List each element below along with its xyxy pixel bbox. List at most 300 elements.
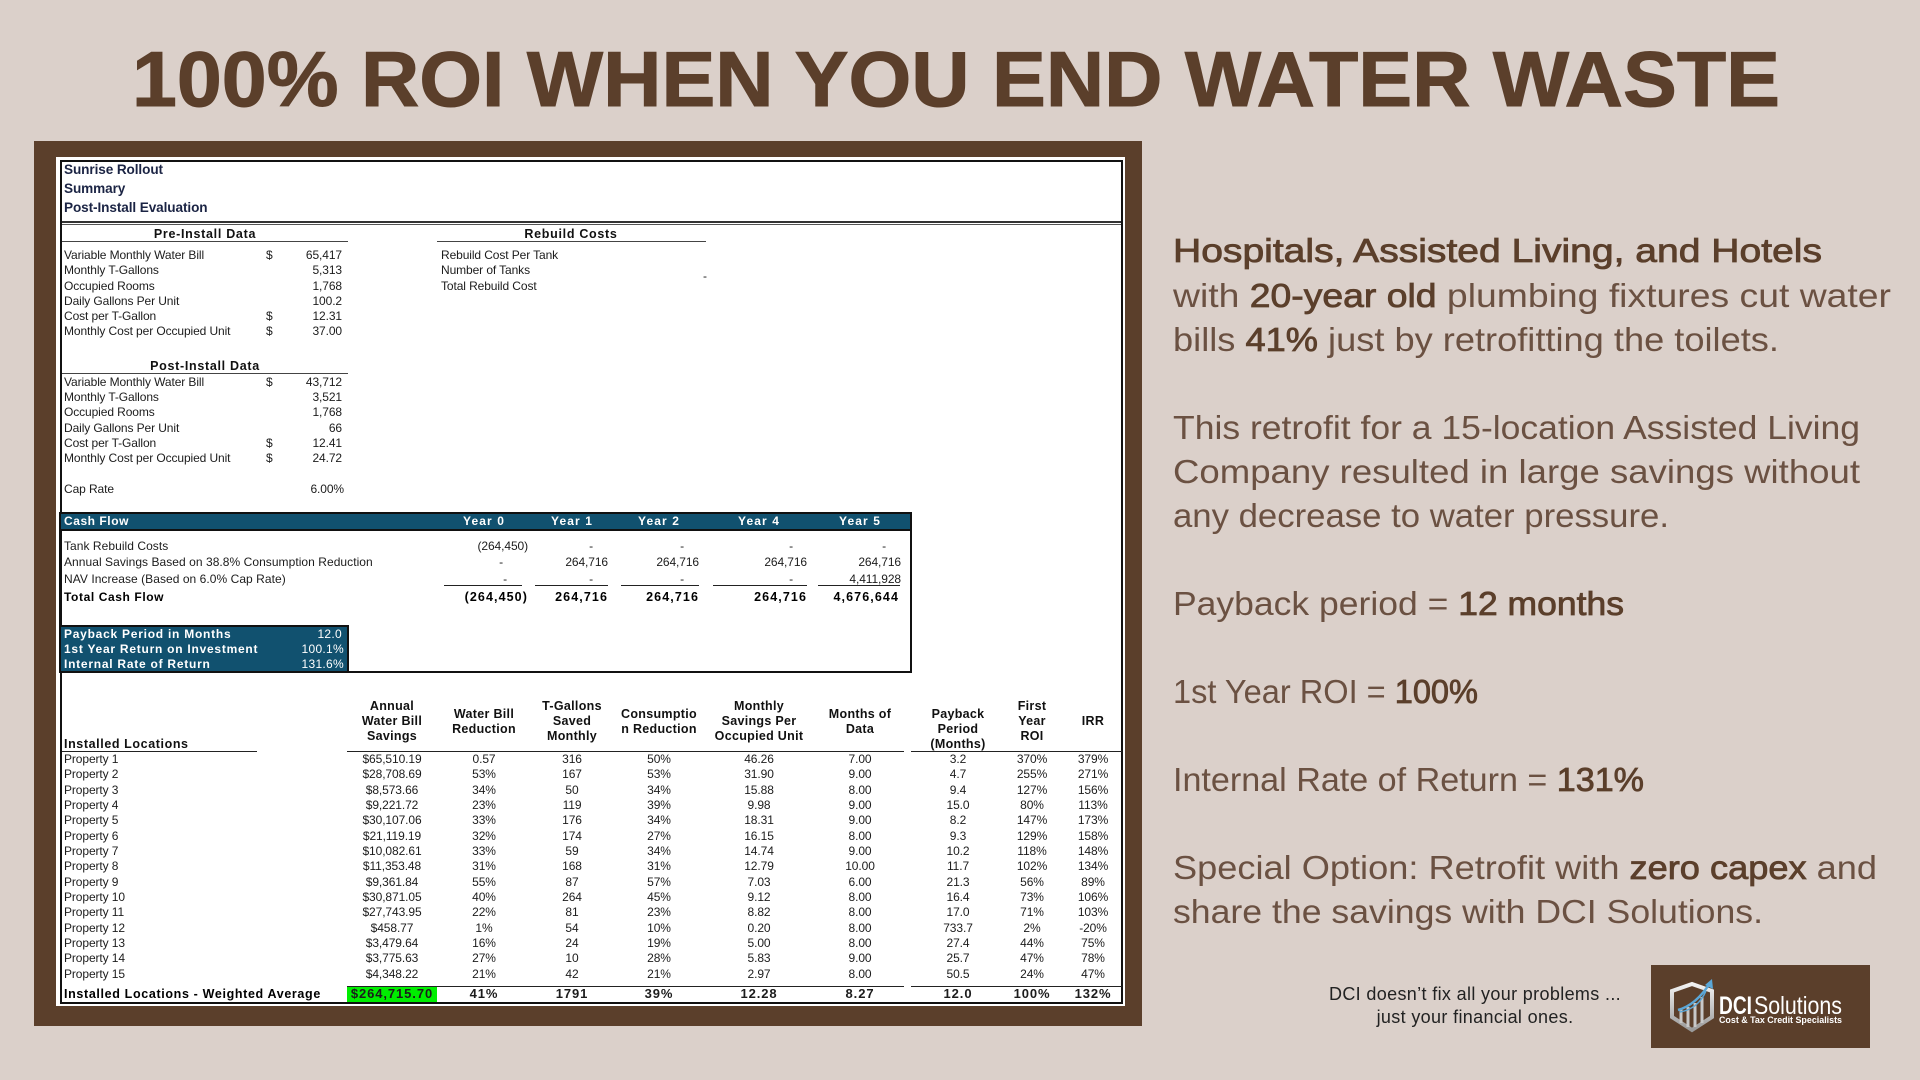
- row: property 15: 24%: [1020, 967, 1044, 981]
- row: weighted average: 12.28: [740, 986, 778, 1001]
- row: property 1: 379%: [1078, 752, 1108, 766]
- heading: rebuild costs: Rebuild Costs: [524, 227, 618, 241]
- row: property 10: 264: [562, 890, 582, 904]
- panel: post-install data: 3,521: [312, 390, 342, 404]
- panel: pre-install data: Monthly Cost per Occupied Unit: [64, 324, 230, 338]
- row: property 8: [64, 859, 1108, 873]
- panel: post-install data: [62, 359, 348, 496]
- row: property 2: $28,708.69: [362, 767, 422, 781]
- row: property 7: Property 7: [64, 844, 118, 858]
- row: property 8: 10.00: [845, 859, 875, 873]
- row: property 8: 12.79: [744, 859, 774, 873]
- row: property 9: $9,361.84: [366, 875, 418, 889]
- row: property 4: 15.0: [947, 798, 969, 812]
- text: special option: share the savings with DCI Solutions.: [1173, 893, 1763, 930]
- row: property 11: $27,743.95: [362, 905, 422, 919]
- text: special option: Special Option: Retrofit with zero capex and: [1173, 849, 1877, 886]
- row: property 10: 40%: [472, 890, 496, 904]
- row: property 3: 127%: [1017, 783, 1047, 797]
- cash flow header bar: Year 4: [738, 514, 780, 528]
- panel: pre-install data: 12.31: [312, 309, 342, 323]
- heading: hospitals, assisted living, and hotels: Hospitals, Assisted Living, and Hotels: [1173, 232, 1822, 269]
- panel: post-install data: 24.72: [312, 451, 342, 465]
- panel: pre-install data: [62, 227, 348, 338]
- panel: pre-install data: 1,768: [312, 279, 342, 293]
- summary metrics box: 131.6%: [302, 657, 344, 671]
- summary metrics box: 12.0: [317, 627, 342, 641]
- row: NAV increase: NAV Increase (Based on 6.0% Cap Rate): [64, 572, 286, 586]
- row: property 9: 21.3: [947, 875, 969, 889]
- row: property 2: 31.90: [744, 767, 774, 781]
- row: total cash flow: [64, 590, 899, 604]
- row: annual savings: 264,716: [764, 555, 807, 569]
- row: property 14: 27%: [472, 951, 496, 965]
- row: property 14: 10: [565, 951, 579, 965]
- row: property 5: Property 5: [64, 813, 118, 827]
- row: property 7: 33%: [472, 844, 496, 858]
- row: property 3: 156%: [1078, 783, 1108, 797]
- heading: post-install data: Post-Install Data: [150, 359, 260, 373]
- table column headers: Reduction: [452, 722, 516, 736]
- row: property 7: 148%: [1078, 844, 1108, 858]
- row: property 9: [64, 875, 1105, 889]
- row: weighted average: Installed Locations - Weighted Average: [64, 987, 321, 1001]
- row: property 9: 56%: [1020, 875, 1044, 889]
- panel: rebuild costs: -: [703, 269, 707, 283]
- logo wordmark: Solutions: [1754, 992, 1842, 1020]
- panel: post-install data: Occupied Rooms: [64, 405, 155, 419]
- table column headers: Consumptio: [621, 707, 697, 721]
- row: property 13: 44%: [1020, 936, 1044, 950]
- row: property 9: 55%: [472, 875, 496, 889]
- row: NAV increase: -: [589, 572, 593, 586]
- row: property 10: 106%: [1078, 890, 1108, 904]
- table column headers: Months of: [829, 707, 891, 721]
- row: property 1: 7.00: [849, 752, 871, 766]
- row: property 6: 158%: [1078, 829, 1108, 843]
- row: property 11: 8.00: [849, 905, 871, 919]
- table column headers: Water Bill: [454, 707, 514, 721]
- row: property 9: Property 9: [64, 875, 118, 889]
- row: weighted average: 1791: [556, 986, 588, 1001]
- row: property 10: 8.00: [849, 890, 871, 904]
- panel: installed locations table: [62, 699, 1122, 1002]
- row: property 8: 134%: [1078, 859, 1108, 873]
- sheet heading: [64, 162, 207, 215]
- row: property 1: 0.57: [473, 752, 495, 766]
- summary metrics box: [61, 625, 349, 671]
- row: property 2: 53%: [472, 767, 496, 781]
- summary metrics box: 100.1%: [302, 642, 344, 656]
- panel: pre-install data: $: [266, 309, 273, 323]
- row: weighted average: $264,715.70: [351, 986, 433, 1001]
- row: property 11: 81: [565, 905, 579, 919]
- text: fixtures: bills 41% just by retrofitting the toilets.: [1173, 321, 1779, 358]
- row: tank rebuild costs: -: [680, 539, 684, 553]
- row: property 5: 147%: [1017, 813, 1047, 827]
- stat: payback period: Payback period = 12 months: [1173, 585, 1624, 622]
- row: property 1: [64, 752, 1108, 766]
- sheet heading: Post-Install Evaluation: [64, 200, 207, 215]
- row: property 14: 5.83: [748, 951, 770, 965]
- table column headers: Payback: [932, 707, 984, 721]
- icon: hexagon chart with arrow: [1672, 979, 1713, 1030]
- panel: pre-install data: $: [266, 324, 273, 338]
- cash flow header bar: Cash Flow: [64, 514, 129, 528]
- row: property 2: 53%: [647, 767, 671, 781]
- row: property 7: $10,082.61: [362, 844, 422, 858]
- row: property 13: $3,479.64: [366, 936, 418, 950]
- row: property 11: [64, 905, 1108, 919]
- panel: rebuild costs: Rebuild Cost Per Tank: [441, 248, 558, 262]
- panel: key findings text: [1172, 232, 1891, 930]
- row: property 15: Property 15: [64, 967, 125, 981]
- row: property 7: 118%: [1017, 844, 1047, 858]
- row: property 4: 119: [563, 798, 581, 812]
- table column headers: Savings Per: [722, 714, 796, 728]
- summary metrics box: Payback Period in Months: [64, 627, 231, 641]
- row: property 3: 34%: [472, 783, 496, 797]
- row: tank rebuild costs: -: [882, 539, 886, 553]
- row: property 14: 47%: [1020, 951, 1044, 965]
- row: property 7: 14.74: [744, 844, 774, 858]
- panel: pre-install data: 65,417: [306, 248, 342, 262]
- panel: post-install data: Daily Gallons Per Unit: [64, 421, 179, 435]
- row: property 5: 173%: [1078, 813, 1108, 827]
- row: property 1: 3.2: [950, 752, 966, 766]
- row: property 15: 47%: [1081, 967, 1105, 981]
- row: weighted average: 132%: [1075, 986, 1111, 1001]
- row: property 7: [64, 844, 1108, 858]
- row: property 12: 54: [565, 921, 579, 935]
- row: total cash flow: Total Cash Flow: [64, 590, 164, 604]
- row: total cash flow: 4,676,644: [833, 590, 899, 604]
- table column headers: n Reduction: [621, 722, 697, 736]
- row: property 4: Property 4: [64, 798, 118, 812]
- panel: spreadsheet frame: [34, 141, 1142, 1026]
- row: property 4: 23%: [472, 798, 496, 812]
- row: property 13: 27.4: [947, 936, 969, 950]
- table column headers: Monthly: [547, 729, 597, 743]
- row: property 12: 0.20: [748, 921, 770, 935]
- summary metrics box: 1st Year Return on Investment: [64, 642, 258, 656]
- row: annual savings: 264,716: [858, 555, 901, 569]
- row: property 9: 89%: [1081, 875, 1105, 889]
- row: property 11: 103%: [1078, 905, 1108, 919]
- row: property 15: $4,348.22: [366, 967, 418, 981]
- panel: rebuild costs: Number of Tanks: [441, 263, 530, 277]
- spreadsheet white sheet: [56, 157, 1125, 1006]
- row: total cash flow: 264,716: [646, 590, 699, 604]
- row: weighted average: 41%: [470, 986, 498, 1001]
- panel: post-install data: 12.41: [312, 436, 342, 450]
- row: property 3: 8.00: [849, 783, 871, 797]
- cash flow header bar: Year 0: [463, 514, 505, 528]
- table column headers: Saved: [553, 714, 591, 728]
- row: property 1: $65,510.19: [362, 752, 422, 766]
- row: property 14: $3,775.63: [366, 951, 418, 965]
- row: property 2: 167: [562, 767, 582, 781]
- row: property 15: 2.97: [748, 967, 770, 981]
- logo wordmark: [1719, 992, 1842, 1026]
- row: property 2: 271%: [1078, 767, 1108, 781]
- row: weighted average: 39%: [645, 986, 673, 1001]
- row: property 14: 78%: [1081, 951, 1105, 965]
- table column headers: (Months): [930, 737, 986, 751]
- table column headers: Savings: [367, 729, 417, 743]
- row: property 11: Property 11: [64, 905, 124, 919]
- row: property 12: -20%: [1079, 921, 1107, 935]
- row: property 12: 1%: [475, 921, 493, 935]
- row: property 4: 113%: [1078, 798, 1108, 812]
- panel: post-install data: Cost per T-Gallon: [64, 436, 156, 450]
- sheet heading: Summary: [64, 181, 125, 196]
- row: property 5: 18.31: [744, 813, 774, 827]
- row: property 15: 21%: [472, 967, 496, 981]
- row: property 7: 34%: [647, 844, 671, 858]
- panel: post-install data: 6.00%: [310, 482, 344, 496]
- row: property 3: Property 3: [64, 783, 118, 797]
- row: total cash flow: (264,450): [465, 590, 528, 604]
- row: property 5: 8.2: [950, 813, 966, 827]
- row: property 5: 9.00: [849, 813, 871, 827]
- row: property 2: 255%: [1017, 767, 1047, 781]
- row: property 1: 50%: [647, 752, 671, 766]
- row: property 4: 9.98: [748, 798, 770, 812]
- cash flow header bar: Year 5: [839, 514, 881, 528]
- row: property 1: 316: [562, 752, 582, 766]
- row: property 1: 370%: [1017, 752, 1047, 766]
- panel: pre-install data: Occupied Rooms: [64, 279, 155, 293]
- row: property 14: Property 14: [64, 951, 125, 965]
- row: property 6: 8.00: [849, 829, 871, 843]
- panel: post-install data: $: [266, 451, 273, 465]
- row: property 10: 73%: [1020, 890, 1044, 904]
- row: tank rebuild costs: -: [589, 539, 593, 553]
- row: property 6: [64, 829, 1108, 843]
- row: property 9: 6.00: [849, 875, 871, 889]
- panel: pre-install data: Cost per T-Gallon: [64, 309, 156, 323]
- row: property 3: 34%: [647, 783, 671, 797]
- table column headers: ROI: [1020, 729, 1044, 743]
- text: retrofit description: [1173, 409, 1860, 534]
- row: tank rebuild costs: Tank Rebuild Costs: [64, 539, 168, 553]
- table column headers: Annual: [370, 699, 414, 713]
- panel: post-install data: 43,712: [306, 375, 342, 389]
- row: property 6: 9.3: [950, 829, 966, 843]
- text: fixtures: with 20-year old plumbing fixtures cut water: [1172, 277, 1891, 314]
- cash flow header bar: [61, 514, 910, 531]
- row: property 8: 168: [562, 859, 582, 873]
- row: property 13: Property 13: [64, 936, 125, 950]
- row: property 11: 8.82: [748, 905, 770, 919]
- panel: pre-install data: 100.2: [312, 294, 342, 308]
- row: tank rebuild costs: [64, 539, 886, 553]
- stat: internal rate of return: Internal Rate of Return = 131%: [1173, 761, 1644, 798]
- row: property 12: $458.77: [371, 921, 413, 935]
- row: property 8: $11,353.48: [363, 859, 421, 873]
- table column headers: [64, 699, 1104, 751]
- row: annual savings: -: [499, 555, 503, 569]
- row: property 13: 8.00: [849, 936, 871, 950]
- table column headers: First: [1018, 699, 1046, 713]
- row: NAV increase: 4,411,928: [849, 572, 901, 586]
- cash flow header bar: Year 1: [551, 514, 593, 528]
- row: property 13: 75%: [1081, 936, 1105, 950]
- title: 100% ROI WHEN YOU END WATER WASTE: [132, 35, 1780, 123]
- table column headers: Period: [938, 722, 978, 736]
- row: property 9: 57%: [647, 875, 671, 889]
- row: property 15: [64, 967, 1105, 981]
- row: property 6: $21,119.19: [363, 829, 421, 843]
- panel: spreadsheet content: [59, 160, 1123, 1004]
- row: property 10: $30,871.05: [362, 890, 422, 904]
- summary metrics box: Internal Rate of Return: [64, 657, 211, 671]
- tagline: DCI doesn’t fix all your problems ...: [1329, 984, 1621, 1004]
- panel: pre-install data: $: [266, 248, 273, 262]
- row: total cash flow: 264,716: [555, 590, 608, 604]
- row: property 12: 733.7: [943, 921, 973, 935]
- logo: DCI Solutions: [1651, 965, 1870, 1048]
- row: property 3: [64, 783, 1108, 797]
- panel: post-install data: $: [266, 375, 273, 389]
- row: property 6: 32%: [472, 829, 496, 843]
- panel: post-install data: Variable Monthly Water Bill: [64, 375, 204, 389]
- table column headers: IRR: [1082, 714, 1104, 728]
- row: property 6: 27%: [647, 829, 671, 843]
- text: retrofit description: Company resulted in large savings without: [1173, 453, 1860, 490]
- row: property 13: 24: [565, 936, 579, 950]
- row: property 6: 174: [562, 829, 582, 843]
- row: tank rebuild costs: (264,450): [478, 539, 528, 553]
- row: tank rebuild costs: -: [789, 539, 793, 553]
- row: property 8: 102%: [1017, 859, 1047, 873]
- panel: post-install data: 66: [329, 421, 342, 435]
- row: property 4: 80%: [1020, 798, 1044, 812]
- row: property 5: 176: [562, 813, 582, 827]
- row: annual savings: [64, 555, 901, 569]
- row: annual savings: Annual Savings Based on 38.8% Consumption Reduction: [64, 555, 373, 569]
- row: property 13: [64, 936, 1105, 950]
- panel: cash flow: [59, 512, 912, 673]
- row: property 5: [64, 813, 1108, 827]
- row: property 2: 4.7: [950, 767, 966, 781]
- panel: post-install data: 1,768: [312, 405, 342, 419]
- row: property 1: Property 1: [64, 752, 118, 766]
- table column headers: Data: [846, 722, 874, 736]
- row: annual savings: 264,716: [565, 555, 608, 569]
- row: weighted average: 8.27: [846, 986, 874, 1001]
- panel: post-install data: Monthly Cost per Occupied Unit: [64, 451, 230, 465]
- panel: rebuild costs: [437, 227, 707, 293]
- panel: pre-install data: 37.00: [312, 324, 342, 338]
- row: property 6: 16.15: [744, 829, 774, 843]
- panel: post-install data: Cap Rate: [64, 482, 114, 496]
- row: weighted average: 100%: [1014, 986, 1050, 1001]
- table column headers: Year: [1018, 714, 1046, 728]
- row: property 10: [64, 890, 1108, 904]
- row: NAV increase: -: [680, 572, 684, 586]
- row: property 12: 8.00: [849, 921, 871, 935]
- row: property 11: 22%: [472, 905, 496, 919]
- text: retrofit description: any decrease to water pressure.: [1173, 497, 1669, 534]
- row: property 6: Property 6: [64, 829, 118, 843]
- panel: pre-install data: Variable Monthly Water Bill: [64, 248, 204, 262]
- row: property 10: 9.12: [748, 890, 770, 904]
- row: property 8: 31%: [472, 859, 496, 873]
- stat: first year ROI: 1st Year ROI = 100%: [1173, 673, 1478, 710]
- row: property 6: 129%: [1017, 829, 1047, 843]
- row: property 2: 9.00: [849, 767, 871, 781]
- row: property 3: 9.4: [950, 783, 966, 797]
- row: property 2: Property 2: [64, 767, 118, 781]
- row: property 15: 42: [565, 967, 579, 981]
- row: property 14: [64, 951, 1105, 965]
- row: NAV increase: -: [789, 572, 793, 586]
- row: annual savings: 264,716: [656, 555, 699, 569]
- row: property 11: 23%: [647, 905, 671, 919]
- tagline: just your financial ones.: [1377, 1006, 1573, 1026]
- panel: post-install data: Monthly T-Gallons: [64, 390, 159, 404]
- table column headers: Water Bill: [362, 714, 422, 728]
- table column headers: Monthly: [734, 699, 784, 713]
- row: property 7: 59: [565, 844, 579, 858]
- row: property 15: 21%: [647, 967, 671, 981]
- panel: pre-install data: Monthly T-Gallons: [64, 263, 159, 277]
- row: property 4: [64, 798, 1108, 812]
- row: property 12: [64, 921, 1107, 935]
- cash flow header bar: Year 2: [638, 514, 680, 528]
- logo wordmark: Cost & Tax Credit Specialists: [1719, 1015, 1842, 1026]
- row: property 10: Property 10: [64, 890, 125, 904]
- panel: post-install data: $: [266, 436, 273, 450]
- panel: pre-install data: 5,313: [312, 263, 342, 277]
- row: property 10: 16.4: [947, 890, 969, 904]
- row: property 9: 87: [565, 875, 579, 889]
- row: property 4: 9.00: [849, 798, 871, 812]
- green total highlight: [347, 987, 437, 1002]
- row: property 4: $9,221.72: [366, 798, 418, 812]
- row: property 11: 17.0: [947, 905, 969, 919]
- row: property 10: 45%: [647, 890, 671, 904]
- row: weighted average: 12.0: [944, 986, 972, 1001]
- text: special option: [1173, 849, 1877, 930]
- row: property 5: 34%: [647, 813, 671, 827]
- row: weighted average: [64, 986, 1111, 1001]
- row: property 2: [64, 767, 1108, 781]
- row: property 15: 50.5: [947, 967, 969, 981]
- row: NAV increase: -: [503, 572, 507, 586]
- panel: pre-install data: Daily Gallons Per Unit: [64, 294, 179, 308]
- row: property 13: 5.00: [748, 936, 770, 950]
- row: property 9: 7.03: [748, 875, 770, 889]
- table column headers: T-Gallons: [542, 699, 602, 713]
- heading: pre-install data: Pre-Install Data: [154, 227, 256, 241]
- logo wordmark: DCI: [1719, 992, 1752, 1020]
- row: property 5: $30,107.06: [362, 813, 422, 827]
- row: property 15: 8.00: [849, 967, 871, 981]
- row: property 3: $8,573.66: [366, 783, 418, 797]
- row: total cash flow: 264,716: [754, 590, 807, 604]
- table column headers: Occupied Unit: [715, 729, 803, 743]
- row: property 8: 31%: [647, 859, 671, 873]
- row: property 14: 9.00: [849, 951, 871, 965]
- panel: rebuild costs: Total Rebuild Cost: [441, 279, 537, 293]
- row: property 12: 10%: [647, 921, 671, 935]
- row: NAV increase: [64, 572, 901, 586]
- text: fixtures: [1172, 277, 1891, 358]
- row: property 12: 2%: [1023, 921, 1041, 935]
